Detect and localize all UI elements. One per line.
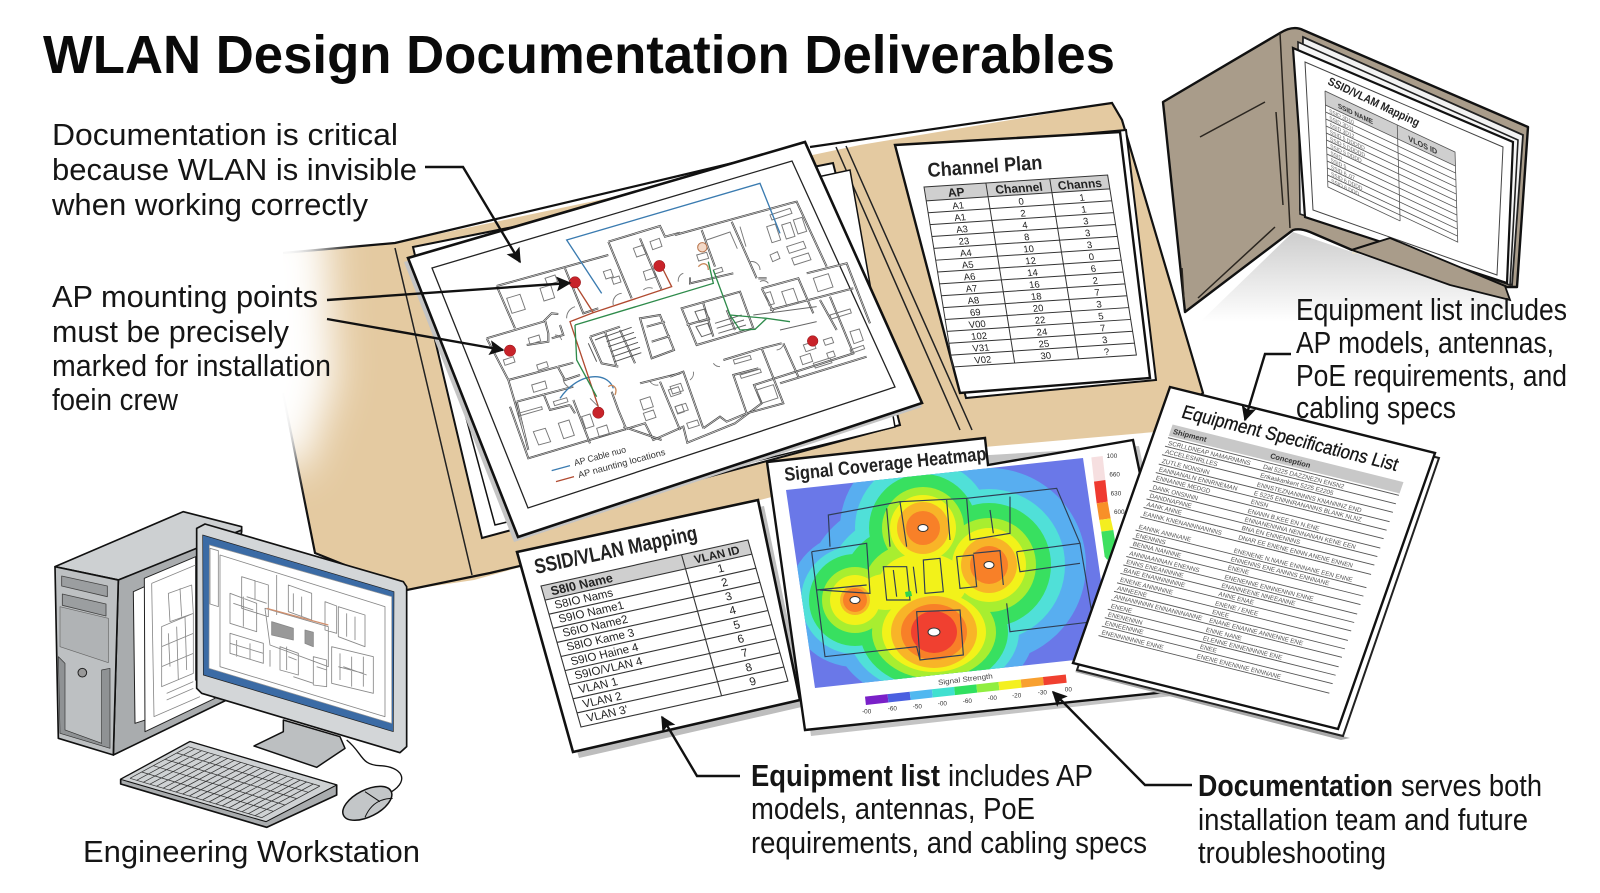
table: channel plan: A6: [963, 272, 976, 283]
table: channel plan: 18: [1030, 291, 1043, 303]
arrow: equipment list to SSID sheet: [662, 717, 740, 776]
panel: equipment specifications list: ENANE ENANNE ANNENNE ENE: [1208, 617, 1304, 647]
panel: equipment specifications list: DANK ONSNNN: [1151, 484, 1199, 502]
panel: equipment specifications list: ANNNAANNAN ENENNS: [1128, 550, 1200, 574]
heading: binder SSID/VLAN: SSID/VLAM Mapping: [1326, 76, 1421, 129]
legend: signal strength scale: -50: [913, 703, 922, 710]
text: documentation serves both: troubleshooting: [1198, 835, 1386, 870]
tower case: [55, 512, 242, 755]
text: equipment list bottom: [751, 758, 1147, 860]
text: documentation is critical: Documentation is critical: [52, 117, 398, 152]
table: channel plan: A4: [959, 248, 973, 260]
arrow: equipment list to spec sheet: [1245, 354, 1291, 420]
table: binder SSID/VLAN: VLOS ID: [1408, 134, 1438, 157]
panel: equipment specifications list: ENENENNN: [1107, 612, 1144, 627]
panel: equipment specifications list: ENNEENNNE: [1104, 620, 1144, 636]
table: channel plan: 0: [1018, 197, 1025, 208]
text: documentation serves both: serves both: [1401, 768, 1542, 803]
table: channel plan: V02: [974, 355, 992, 367]
text: AP mounting points: [52, 279, 331, 417]
panel: equipment specifications list: ENENE ENENNNE ENNNANE: [1195, 653, 1282, 681]
table: channel plan: 3: [1101, 335, 1108, 346]
table: channel plan: 7: [1094, 288, 1101, 299]
panel: equipment specifications list: EANNANALN ENNRNEMAN: [1158, 466, 1239, 493]
table: channel plan: 3: [1096, 299, 1103, 311]
table: SSID/VLAN mapping: 3: [724, 591, 734, 604]
table: channel plan: A8: [967, 295, 980, 307]
heading: heatmap: Signal Coverage Heatmap: [783, 444, 987, 486]
panel: equipment specifications list: Shipment: [1172, 427, 1208, 444]
screen floor plan: [230, 575, 373, 693]
table: binder SSID/VLAN: SSID 6 .07: [1331, 165, 1355, 182]
panel: equipment specifications list: Conception: [1269, 451, 1312, 470]
table: channel plan: Channel: [994, 180, 1044, 197]
table: SSID/VLAN mapping: VLAN 3': [585, 704, 629, 725]
panel: equipment specifications list: ENEE: [1211, 609, 1230, 620]
table: binder SSID/VLAN: SSID 3D10: [1329, 109, 1354, 126]
table: SSID/VLAN mapping: 4: [728, 605, 738, 618]
panel: equipment specifications list: BENNA NANNNE: [1132, 541, 1182, 559]
panel: closed binder with SSID/VLAN sheet: [1163, 28, 1528, 322]
panel: equipment specifications list: BANE ENANNNNNNE: [1122, 567, 1186, 589]
table: channel plan: [924, 175, 1137, 368]
panel: equipment specifications list: Dal 5225 DAZZNEZN ENSN2: [1262, 464, 1345, 491]
table: SSID/VLAN mapping: 5: [732, 619, 742, 632]
panel: equipment specifications list: ENENENNE ENNNENNN ENNE: [1223, 574, 1314, 603]
monitor stand: [254, 720, 345, 767]
panel: equipment specifications list: ENEE: [1199, 644, 1218, 654]
chart: heatmap: [786, 458, 1101, 688]
table: SSID/VLAN mapping: VLAN 1: [577, 676, 619, 696]
table: SSID/VLAN mapping: S8IO Nams: [553, 587, 615, 612]
panel: equipment specifications list: BNA EN ENNENNNS: [1241, 525, 1301, 546]
table: SSID/VLAN mapping: VLAN 2: [581, 691, 623, 711]
text: AP mounting points: marked for installation: [52, 348, 331, 383]
text: equipment list bottom: requirements, and cabling specs: [751, 825, 1147, 860]
panel: equipment specifications list: ENNANNE MEDGD: [1155, 475, 1212, 495]
legend: signal strength scale: -30: [1038, 690, 1047, 697]
text: engineering workstation label: Engineering Workstation: [83, 834, 420, 869]
arrow: AP mounting to upper AP: [327, 283, 570, 300]
table: SSID/VLAN mapping: S9IO Name1: [557, 600, 625, 626]
text: equipment list bottom: includes AP: [948, 758, 1093, 793]
text: equipment list bottom: Equipment list: [751, 758, 940, 793]
panel: equipment specifications list: ENNS ENEANNNNE: [1125, 559, 1185, 580]
arrow: documentation to heatmap: [1053, 692, 1192, 785]
panel: equipment specifications list: ACCELESNRLLES: [1164, 449, 1219, 468]
legend: vertical scale: 660: [1109, 472, 1120, 479]
text: AP mounting points: foein crew: [52, 382, 179, 417]
panel: floor plan sheet: [404, 142, 922, 542]
text: documentation is critical: because WLAN is invisible: [52, 152, 417, 187]
legend: vertical scale: [1091, 453, 1125, 560]
table: channel plan: 6: [1090, 264, 1097, 275]
table: channel plan: 23: [958, 236, 970, 248]
text: equipment list top right: [1296, 292, 1567, 425]
AP markers: [504, 260, 818, 418]
floor plan overlay: [812, 488, 1093, 660]
table: channel plan: 25: [1038, 339, 1050, 350]
table: channel plan: 1: [1079, 193, 1086, 204]
panel: equipment specifications list: ENANN B.KEE EN N.ENE: [1246, 508, 1320, 533]
legend: vertical scale: 100: [1107, 453, 1118, 460]
table: channel plan: AP: [947, 185, 966, 200]
table: channel plan: 3: [1086, 240, 1093, 251]
table: channel plan: A1: [952, 200, 965, 212]
table: channel plan: 30: [1040, 351, 1052, 362]
arrow: documentation to floor plan: [425, 167, 520, 262]
panel: equipment specifications list: EANNK ANNNANE: [1138, 524, 1192, 544]
table: channel plan: 24: [1036, 327, 1048, 338]
table: binder SSID/VLAN: SSID 5: [1331, 158, 1346, 171]
mouse: [338, 779, 397, 827]
panel: equipment specifications list: ZUTLE NONSNN: [1161, 458, 1211, 477]
chart: floor plan drawing: [487, 183, 870, 482]
table: SSID/VLAN mapping: 1: [716, 563, 726, 576]
table: binder SSID/VLAN: SSID 5 DDDDD: [1330, 137, 1365, 159]
table: channel plan: 14: [1026, 268, 1039, 279]
table: channel plan: 10: [1023, 244, 1035, 255]
panel: equipment specifications list: ENENE: [1227, 565, 1250, 576]
panel: SSID/VLAN mapping sheet: [517, 500, 806, 758]
panel: equipment specifications list: EANNK KNENANNNANNNS: [1142, 511, 1223, 537]
table: SSID/VLAN mapping: 9: [748, 676, 758, 689]
panel: equipment specifications list: ENENE / ENEE: [1214, 600, 1259, 618]
table: channel plan: A3: [955, 224, 969, 236]
table: binder SSID/VLAN: SSID: [1330, 151, 1342, 162]
table: channel plan: 102: [970, 331, 988, 343]
text: documentation serves both: [1198, 768, 1542, 870]
legend: signal strength scale: -20: [1012, 692, 1022, 699]
heading: channel plan: Channel Plan: [927, 152, 1043, 182]
table: binder SSID/VLAN: SSID NAME: [1338, 103, 1373, 127]
text: equipment list bottom: models, antennas, PoE: [751, 791, 1035, 826]
table: binder SSID/VLAN: SSID 6 DDDD: [1331, 172, 1363, 192]
table: channel plan: A1: [954, 212, 967, 224]
table: channel plan: 4: [1021, 220, 1029, 231]
legend: vertical scale: 630: [1111, 490, 1122, 497]
table: SSID/VLAN mapping: 6: [736, 633, 746, 646]
panel: equipment specifications list: DANDNAPANE: [1148, 493, 1193, 510]
panel: channel plan sheet: [895, 130, 1156, 398]
table: SSID/VLAN mapping: 7: [740, 647, 750, 660]
table: channel plan: 69: [969, 307, 982, 319]
arrow: AP mounting to left AP: [327, 319, 503, 350]
panel: equipment specifications list: ENANNEENE NNEEANNE: [1220, 583, 1296, 607]
legend: signal strength scale: [862, 671, 1072, 715]
legend: vertical scale: 600: [1114, 509, 1125, 516]
panel: equipment specifications list: ENENENE N.NANE ENNNANE EEN ENNE: [1233, 548, 1353, 584]
text: documentation serves both: installation team and future: [1198, 802, 1528, 837]
legend: signal strength scale: -60: [888, 706, 897, 713]
panel: equipment specifications list: ENENE ANNNNNE: [1119, 577, 1174, 596]
table: SSID/VLAN mapping: S9IO/VLAN 4: [573, 656, 645, 682]
table: channel plan: 20: [1032, 303, 1044, 315]
panel: equipment specifications list: ENNE NANE: [1205, 627, 1243, 642]
legend: signal strength scale: Signal Strength: [937, 671, 993, 687]
table: channel plan: ?: [1103, 347, 1110, 358]
panel: equipment specifications list: ENNANENNNA NENNANAN KENE EEN: [1243, 517, 1357, 551]
table: SSID/VLAN mapping: 2: [720, 577, 730, 590]
table: channel plan: 2: [1092, 276, 1099, 287]
table: channel plan: 0: [1088, 252, 1095, 263]
legend: signal strength scale: -00: [862, 708, 872, 715]
text: AP mounting points: AP mounting points: [52, 279, 318, 314]
panel: equipment specifications list: ANNEENE: [1116, 585, 1148, 599]
panel: back sheet of floor plan stack: [413, 163, 900, 538]
table: SSID/VLAN mapping: [541, 540, 788, 727]
table: SSID/VLAN mapping: S8IO Kame 3: [565, 627, 636, 654]
panel: equipment specifications list: ANNE ENAE: [1217, 591, 1255, 606]
panel: equipment specifications list: ELENNE ENNENNNNE ENE: [1202, 635, 1283, 662]
panel: equipment specifications list: ENENE: [1110, 603, 1133, 615]
heading: SSID/VLAN mapping: SSID/VLAN Mapping: [532, 522, 699, 579]
table: channel plan: 22: [1034, 315, 1046, 327]
table: channel plan: V31: [972, 343, 990, 355]
legend: AP Cable nuo: [573, 444, 627, 468]
table: binder SSID/VLAN: SSID 5 DDDD: [1330, 144, 1362, 164]
table: SSID/VLAN mapping: S9IO Haine 4: [569, 642, 641, 668]
text: documentation is critical: when working correctly: [51, 187, 368, 222]
legend: signal strength scale: -00: [938, 701, 947, 708]
table: SSID/VLAN mapping: 8: [744, 662, 754, 675]
legend: AP naunting locations: [577, 447, 667, 480]
table: SSID/VLAN mapping: S6IO Name2: [561, 614, 629, 640]
cable: [347, 740, 402, 792]
table: channel plan: 16: [1028, 279, 1041, 291]
text: equipment list top right: cabling specs: [1296, 390, 1456, 425]
table: channel plan: 8: [1023, 232, 1030, 243]
panel: equipment specifications list: DNAR EE ENENE ENNN ANENE ENNEN: [1237, 534, 1354, 570]
table: binder SSID/VLAN: SSID 3D12: [1330, 123, 1354, 140]
table: channel plan: V00: [968, 319, 987, 331]
table: channel plan: Channs: [1057, 176, 1103, 193]
legend: signal strength scale: -60: [963, 698, 972, 705]
table: SSID/VLAN mapping: S8I0 Name: [549, 571, 614, 598]
table: channel plan: 5: [1098, 311, 1105, 322]
table: channel plan: 2: [1020, 208, 1027, 220]
panel: equipment specifications list: ENNSTEZNANNNNS KNANNNZ END: [1256, 482, 1363, 514]
table: binder SSID/VLAN: SSID 6 DDD: [1331, 179, 1359, 198]
text: AP mounting points: must be precisely: [52, 314, 289, 349]
text: documentation is critical: [51, 117, 417, 222]
table: channel plan: A5: [961, 260, 974, 271]
text: documentation serves both: Documentation: [1198, 768, 1393, 803]
table: binder SSID/VLAN: SSID 5 DDDDD: [1330, 130, 1365, 152]
panel: equipment specifications list: ENSN: [1250, 499, 1269, 510]
papers beside tower: [133, 557, 215, 732]
icon: engineering workstation computer: [55, 512, 407, 827]
table: channel plan: A7: [965, 284, 978, 295]
panel: equipment specifications list: ENENNNNNNE ENNE: [1100, 629, 1164, 651]
table: SSID/VLAN mapping: VLAN ID: [693, 545, 741, 566]
panel: equipment specifications list: Enkaskankent 5225 E2205: [1259, 472, 1335, 497]
monitor: [197, 524, 407, 753]
table: channel plan: 3: [1084, 228, 1091, 239]
panel: equipment specifications list: [1073, 387, 1439, 740]
table: channel plan: 3: [1082, 216, 1089, 228]
panel: open tan folder on table: [230, 103, 1203, 590]
panel: equipment specifications list: AANK ANNE: [1145, 501, 1183, 517]
panel: equipment specifications list: E 5225 ENNNRANANNS BLANK NLNZ: [1253, 490, 1363, 524]
table: channel plan: 1: [1080, 204, 1087, 216]
title: WLAN Design Documentation Deliverables: [43, 25, 1115, 85]
legend: signal strength scale: -00: [988, 695, 997, 702]
table: binder SSID/VLAN: [1325, 91, 1458, 248]
panel: equipment specifications list: ANNANNNNN ENNANNNANNE: [1113, 594, 1203, 622]
heading: equipment specifications: Equipment Specifications List: [1179, 402, 1402, 476]
keyboard: [121, 742, 337, 827]
legend: [552, 444, 667, 482]
text: equipment list top right: AP models, antennas,: [1296, 325, 1554, 360]
table: binder SSID/VLAN: SSID 3D11: [1329, 116, 1354, 133]
cable runs: [560, 183, 790, 407]
panel: equipment specifications list: SCRLLDNEAP NAMARNMNS: [1167, 440, 1252, 467]
panel: equipment specifications list: ENNENNS ENE ANNNS ENNNANE: [1230, 556, 1330, 587]
table: channel plan: 12: [1025, 256, 1037, 267]
table: channel plan: 7: [1099, 323, 1106, 334]
panel: signal coverage heatmap sheet: [767, 438, 1190, 736]
legend: signal strength scale: 00: [1065, 687, 1072, 694]
panel: equipment specifications list: ENENNNS: [1135, 532, 1167, 546]
